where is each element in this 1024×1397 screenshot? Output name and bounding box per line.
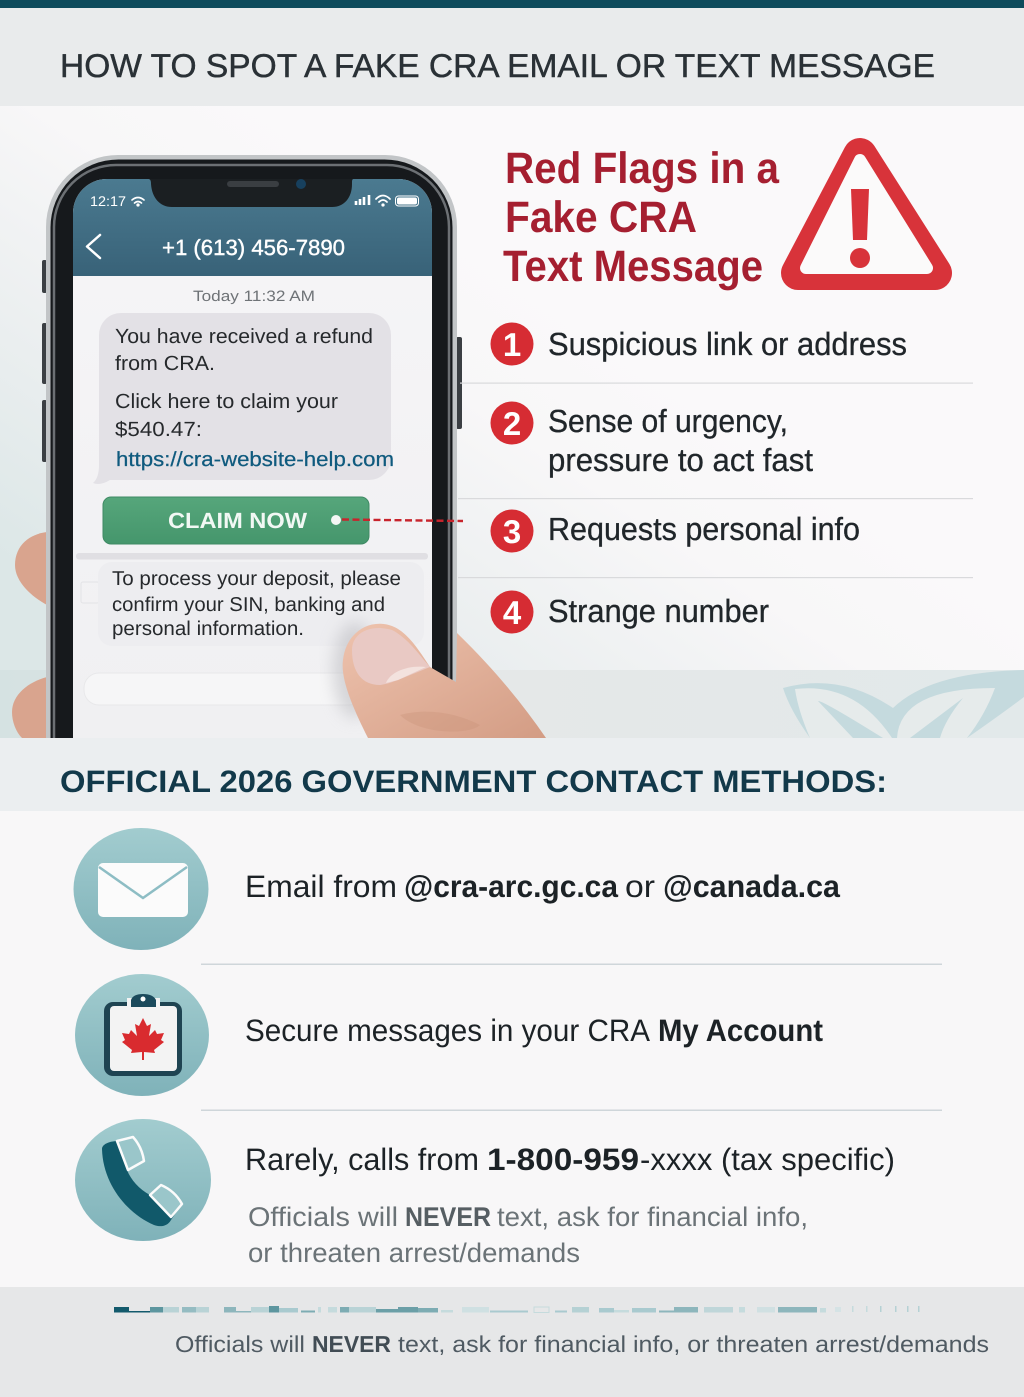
flag 4 [490,590,769,634]
message bubble: Click here to claim your [115,390,338,413]
title banner [0,8,1024,106]
message bubble: from CRA. [115,352,215,375]
small square [81,582,99,603]
officials warning text: text, ask for financial info, [497,1202,808,1232]
top accent bar [0,0,1024,8]
status icons [132,195,418,206]
message bubble: You have received a refund [115,325,373,348]
callout dashed line [342,520,463,521]
title banner: HOW TO SPOT A FAKE CRA EMAIL OR TEXT MESSAGE [60,47,935,84]
second message bubble [98,570,400,640]
second message bubble: To process your deposit, please [112,568,401,590]
icon: telephone [75,1119,211,1241]
claim now button: CLAIM NOW [168,508,307,533]
contact account text: My Account [658,1013,823,1048]
message bubble [93,313,394,484]
officials warning text: Officials will [248,1202,398,1232]
footer band [0,1287,1024,1397]
flag 1: Suspicious link or address [548,326,907,362]
contact email text: or [625,869,655,904]
contact methods heading [0,738,1024,811]
flag 2: 2 [503,405,521,442]
status bar time: 12:17 [90,193,126,209]
thumb shadow [333,622,377,718]
contact email text [245,869,841,904]
reply input [84,673,364,705]
flag 3 [490,510,860,552]
divider [460,382,973,384]
footer note [175,1331,989,1357]
divider [458,498,973,499]
icon: envelope [74,828,208,950]
message header bar [73,179,432,276]
red flags heading: Text Message [503,242,763,291]
decorative band with leaf [0,670,1024,738]
thumbnail [352,628,430,685]
contact account text: Secure messages in your CRA [245,1013,650,1048]
officials warning text: NEVER [405,1202,491,1232]
contact phone text: -xxxx (tax specific) [640,1142,895,1177]
notch [148,179,354,207]
divider [201,1110,942,1111]
contact phone text: Rarely, calls from [245,1142,479,1177]
knuckle shading [400,712,480,732]
flag 3: 3 [503,513,521,550]
second message bubble: confirm your SIN, banking and [112,594,385,616]
left fingers [12,532,47,738]
footer note: Officials will [175,1331,305,1357]
contact email text: @cra-arc.gc.ca [404,869,619,904]
message time: Today 11:32 AM [193,288,315,305]
contact email text: Email from [245,869,397,904]
footer note: NEVER [312,1331,391,1357]
red flags heading [503,144,779,291]
flag 1: 1 [503,326,521,363]
flag 2: pressure to act fast [548,442,813,478]
garbled strip [114,1306,920,1312]
contact email text: @canada.ca [663,869,841,904]
phone side buttons [42,260,462,462]
footer note: text, ask for financial info, or threaten arrest/demands [398,1331,989,1357]
flag 4: Strange number [548,593,769,629]
message bubble: https://cra-website-help.com [116,448,394,471]
icon: warning triangle [798,155,935,273]
divider [201,964,942,965]
divider bar [76,553,428,560]
phone screen [73,179,432,738]
phone mockup [42,155,462,738]
flag 2: Sense of urgency, [548,403,788,439]
officials warning text [248,1202,808,1268]
second message bubble: personal information. [112,618,304,640]
flag 3: Requests personal info [548,511,860,547]
contact methods heading: OFFICIAL 2026 GOVERNMENT CONTACT METHODS: [60,764,887,799]
contact phone text: 1-800-959 [487,1142,639,1177]
message bubble: $540.47: [115,418,202,441]
phone number: +1 (613) 456-7890 [162,235,345,260]
contact phone text [245,1142,895,1177]
flag 4: 4 [503,594,522,631]
flag 2 [490,402,813,478]
phone body [46,155,457,738]
red flags heading: Fake CRA [505,193,697,242]
red flags heading: Red Flags in a [505,144,779,193]
divider [458,577,973,578]
back chevron [87,235,100,258]
thumb [343,624,546,738]
claim now button [103,497,369,544]
icon: clipboard with maple leaf [75,974,209,1096]
officials warning text: or threaten arrest/demands [248,1238,580,1268]
red flags panel background [0,106,1024,670]
